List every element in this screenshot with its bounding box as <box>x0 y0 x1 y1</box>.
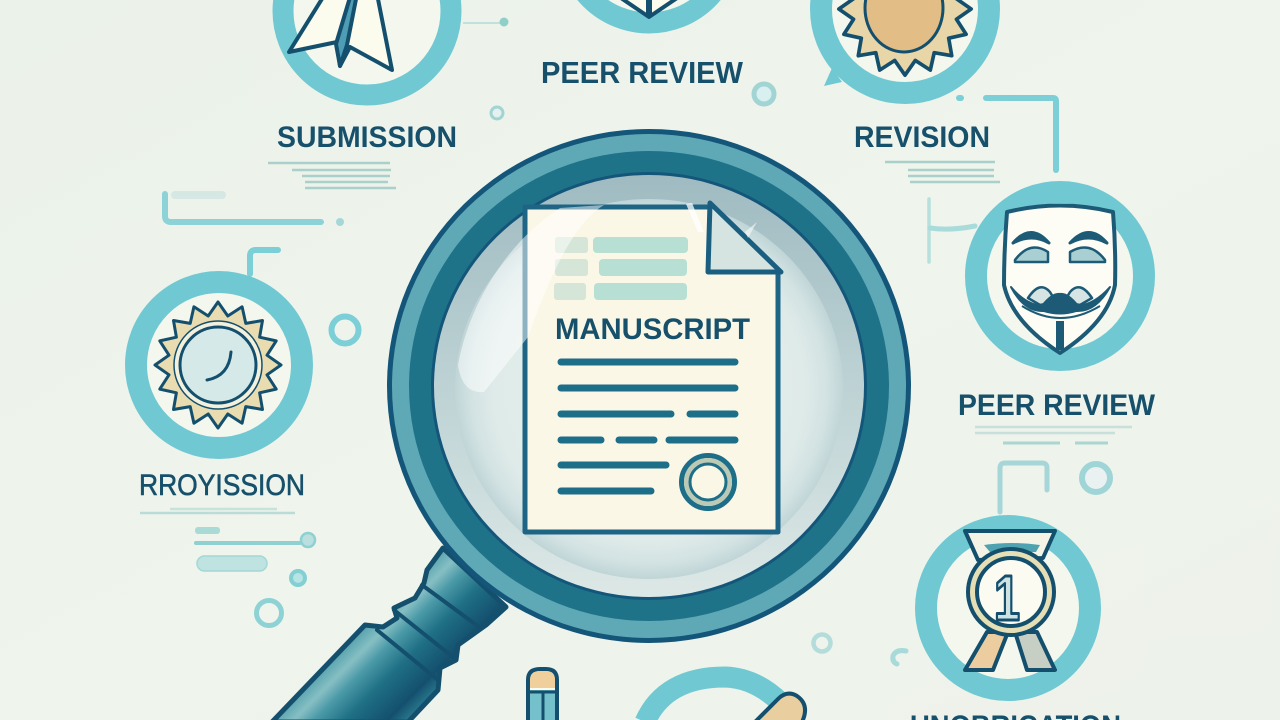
icon ring: peer review top <box>566 0 732 23</box>
connector: provision lower bars <box>195 527 315 571</box>
step: bottom ring and tool <box>645 677 805 720</box>
icon: paper plane <box>289 0 392 70</box>
icon ring: provision <box>136 282 302 448</box>
icon: tan tool <box>755 694 805 720</box>
connector: left of mask <box>929 199 975 262</box>
label: provision: RROYISSION <box>139 469 305 502</box>
label: peer review right: PEER REVIEW <box>958 389 1156 422</box>
connector: revision to mask <box>959 98 1056 170</box>
label: submission: SUBMISSION <box>277 121 457 154</box>
icon: medal <box>965 531 1055 670</box>
paper sheet <box>525 207 778 532</box>
connector: medal bracket <box>1000 463 1047 512</box>
step: revision <box>821 0 1000 182</box>
approval stamp <box>682 456 734 508</box>
connector: upper-left bracket <box>165 194 344 226</box>
magnifying glass <box>272 129 911 720</box>
body text lines <box>561 362 735 491</box>
glass highlight <box>458 203 757 392</box>
small ring: near peer review <box>754 84 774 104</box>
icon ring: bottom <box>645 677 780 720</box>
step: submission <box>268 0 457 188</box>
icon ring: peer review right <box>976 192 1144 360</box>
manuscript document <box>525 203 781 532</box>
icon ring: medal <box>926 526 1090 690</box>
description lines: revision <box>885 162 1000 182</box>
folded corner <box>708 203 781 272</box>
icon: anonymous mask <box>1004 206 1115 353</box>
small ring: near submission <box>491 107 503 119</box>
label: peer review top: PEER REVIEW <box>541 55 744 90</box>
small arc: left of medal <box>893 651 906 664</box>
icon: seal <box>839 0 971 75</box>
connector: top-left dot <box>463 18 508 26</box>
icon: sun badge <box>155 302 281 428</box>
connector hook: provision <box>250 250 278 274</box>
manuscript title: MANUSCRIPT <box>555 313 750 346</box>
speech tail: revision ring <box>824 68 842 86</box>
medal number: 1 <box>994 562 1020 634</box>
lens glass <box>455 199 843 579</box>
description lines: submission <box>268 163 396 188</box>
small ring: below lens <box>814 634 830 652</box>
step: publication medal <box>910 526 1121 720</box>
magnifier handle <box>272 548 506 720</box>
small ring: near medal <box>1082 464 1110 492</box>
icon ring: submission <box>283 0 451 95</box>
step: peer review top <box>541 0 744 90</box>
step: bottom pencil <box>528 669 557 720</box>
icon: mask chin <box>618 0 680 17</box>
icon ring: revision <box>821 0 989 93</box>
faded header table <box>554 237 688 300</box>
description lines: peer review right <box>975 427 1132 443</box>
small ring: provision lower <box>256 600 282 626</box>
step: provision <box>136 250 315 571</box>
small ring: provision dot <box>291 571 305 585</box>
description lines: provision <box>140 509 295 513</box>
label: revision: REVISION <box>854 121 990 154</box>
lens frame <box>387 129 911 643</box>
small ring: left of lens <box>332 316 358 344</box>
step: peer review right <box>958 192 1156 443</box>
